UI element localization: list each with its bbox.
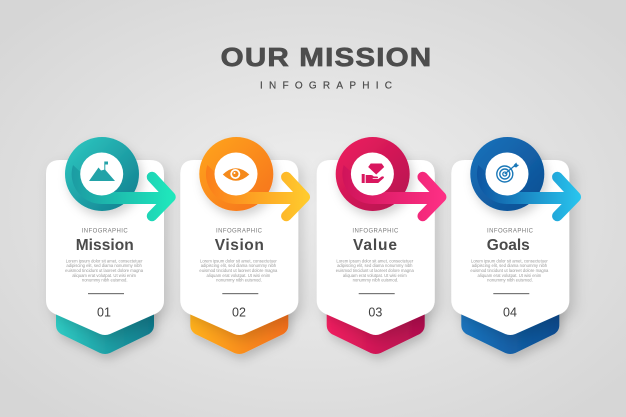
heading: goals: Goals bbox=[487, 237, 530, 254]
circle badge: goals bbox=[470, 137, 544, 211]
icon disc: vision bbox=[214, 152, 258, 196]
text block: vision: adipiscing elit, sed diama nonummy nibh bbox=[201, 263, 277, 268]
panel: goals bbox=[451, 137, 576, 354]
icon disc: mission bbox=[80, 152, 123, 196]
text block: value: aliquam erat volutpat. Ut wisi enim bbox=[343, 273, 407, 278]
heading: mission: Mission bbox=[76, 237, 134, 254]
text block: mission: aliquam erat volutpat. Ut wisi enim bbox=[72, 273, 137, 278]
ribbon: value bbox=[327, 300, 425, 354]
icon: hand holding diamond bbox=[362, 164, 384, 183]
arrow: mission bbox=[72, 165, 170, 216]
text block: mission: nonummy nibh euismod. bbox=[82, 278, 128, 283]
circle badge: value bbox=[336, 137, 410, 211]
label: vision: INFOGRAPHIC bbox=[216, 228, 263, 234]
number: 02: 02 bbox=[232, 306, 246, 320]
arrow: goals bbox=[477, 165, 576, 216]
text block: goals: aliquam erat volutpat. Ut wisi enim bbox=[478, 273, 542, 278]
ribbon: vision bbox=[190, 300, 288, 354]
subtitle: INFOGRAPHIC bbox=[260, 80, 392, 92]
ribbon: mission bbox=[56, 300, 154, 354]
text block: mission: euismod tincidunt ut laoreet dolore magna bbox=[65, 268, 144, 273]
text block: mission: adipiscing elit, sed diama nonummy nibh bbox=[66, 263, 142, 268]
number: 04: 04 bbox=[503, 306, 517, 320]
title: OUR MISSION bbox=[221, 43, 432, 72]
text block: vision: Lorem ipsum dolor sit amet, consectetuer bbox=[200, 258, 277, 264]
card: mission bbox=[46, 160, 164, 335]
label: mission: INFOGRAPHIC bbox=[82, 228, 128, 234]
text block: value: Lorem ipsum dolor sit amet, consectetuer bbox=[336, 258, 414, 264]
circle badge: mission bbox=[65, 137, 139, 211]
text block: value: adipiscing elit, sed diama nonummy nibh bbox=[337, 263, 413, 268]
label: goals: INFOGRAPHIC bbox=[487, 228, 534, 234]
text block: goals: adipiscing elit, sed diama nonummy nibh bbox=[472, 263, 548, 268]
icon: target bbox=[497, 162, 519, 182]
text block: vision: nonummy nibh euismod. bbox=[216, 278, 262, 283]
text block: goals: euismod tincidunt ut laoreet dolore magna bbox=[470, 268, 549, 273]
arrow: vision bbox=[206, 165, 305, 216]
circle badge: vision bbox=[199, 137, 273, 211]
text block: vision: aliquam erat volutpat. Ut wisi enim bbox=[207, 273, 271, 278]
text block: value: nonummy nibh euismod. bbox=[353, 278, 398, 283]
text block: vision: euismod tincidunt ut laoreet dolore magna bbox=[199, 268, 278, 273]
panel: mission bbox=[46, 137, 170, 354]
ribbon: goals bbox=[461, 300, 559, 354]
text block: value: euismod tincidunt ut laoreet dolore magna bbox=[336, 268, 414, 273]
icon: eye bbox=[223, 168, 249, 181]
card: value bbox=[317, 160, 435, 335]
number: 01: 01 bbox=[97, 306, 111, 320]
heading: value: Value bbox=[353, 237, 397, 254]
card: vision bbox=[180, 160, 298, 335]
panel: vision bbox=[180, 137, 305, 354]
number: 03: 03 bbox=[368, 306, 382, 320]
heading: vision: Vision bbox=[215, 237, 264, 254]
panel: value bbox=[317, 137, 441, 354]
label: value: INFOGRAPHIC bbox=[352, 228, 399, 234]
icon disc: goals bbox=[486, 152, 528, 196]
text block: goals: Lorem ipsum dolor sit amet, consectetuer bbox=[471, 258, 548, 264]
icon: mountain and flag bbox=[89, 162, 115, 181]
arrow: value bbox=[342, 165, 441, 216]
text block: goals: nonummy nibh euismod. bbox=[487, 278, 533, 283]
icon disc: value bbox=[351, 152, 394, 196]
text block: mission: Lorem ipsum dolor sit amet, consectetuer bbox=[66, 258, 143, 264]
card: goals bbox=[451, 160, 569, 335]
